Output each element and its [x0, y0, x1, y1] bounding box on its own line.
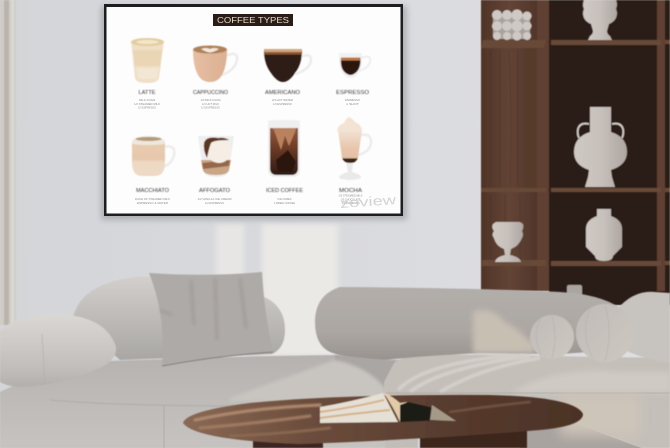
label: cappuccino: CAPPUCCINO	[193, 90, 229, 96]
label: macchiato: MACCHIATO	[136, 188, 170, 194]
seat light stripes	[398, 355, 540, 392]
recipe: affogato: 1/2 ESPRESSO	[205, 201, 225, 205]
watermark: zoview	[340, 192, 397, 211]
coffee: macchiato	[132, 136, 174, 194]
shelf back right, dark	[549, 0, 670, 305]
vase: scalloped	[583, 0, 617, 40]
recipe: mocha: 1/3 ESPRESSO	[342, 201, 360, 205]
right sofa	[315, 287, 670, 448]
recipe: iced coffee: 1 BREW COFFEE	[274, 201, 295, 205]
throw pillow	[149, 272, 273, 366]
coffee: iced coffee	[266, 120, 303, 194]
vertical posts	[525, 0, 665, 291]
recipe: mocha: 1/3 CHOCOLATE	[340, 197, 361, 201]
left bay, walnut	[481, 0, 538, 291]
bolster seam	[42, 334, 45, 385]
gap between sofa modules	[335, 355, 395, 400]
recipe: cappuccino: 1/3 ESPRESSO	[201, 106, 221, 110]
ball cushion large	[576, 304, 634, 362]
vase: amphora	[574, 107, 627, 187]
table top	[183, 395, 583, 444]
recipe: latte	[134, 98, 160, 110]
poster frame	[104, 4, 403, 216]
table streaks	[195, 402, 530, 436]
vase: low cup	[492, 222, 523, 262]
poster shadow	[101, 6, 407, 220]
base vertical seam	[163, 406, 165, 448]
recipe: macchiato	[135, 197, 170, 205]
seat edge	[384, 392, 670, 394]
arm bolster	[0, 314, 116, 387]
table legs	[253, 430, 527, 448]
label: latte: LATTE	[138, 90, 156, 96]
label: espresso: ESPRESSO	[336, 90, 370, 96]
recipe: latte: 1/3 ESPRESSO	[138, 106, 157, 110]
recipe: macchiato: ESPRESSO & WATER	[137, 201, 168, 205]
recipe: iced coffee: ICE CUBES	[278, 197, 292, 201]
seat highlight	[510, 371, 670, 393]
right arm cushion	[619, 292, 670, 363]
recipe: americano	[272, 98, 293, 106]
coffee: americano	[264, 49, 311, 96]
recipe: cappuccino	[200, 98, 221, 110]
label: iced coffee: ICED COFFEE	[266, 188, 303, 194]
sofa back cushion	[73, 277, 285, 360]
label: americano: AMERICANO	[265, 90, 301, 96]
sunlight patch on back	[473, 310, 535, 353]
shelf boards	[481, 40, 670, 266]
coffee: affogato	[198, 136, 234, 194]
coffee: mocha	[337, 117, 371, 194]
recipe: espresso: ESPRESSO	[345, 98, 361, 102]
recipe: americano: 1/3 ESPRESSO	[273, 102, 293, 106]
recipe: latte: MILK FOAM	[139, 98, 156, 102]
coffee: cappuccino	[193, 46, 237, 96]
title	[213, 14, 293, 26]
recipe: iced coffee	[274, 197, 295, 205]
vase: small behind sofa	[567, 285, 582, 296]
recipe: mocha: 1/3 STEAMED MILK	[338, 194, 363, 198]
recipe: macchiato: DASH OF STEAMED MILK	[135, 197, 170, 201]
coffee table	[183, 392, 583, 448]
recipe: cappuccino: 1/3 MILK FOAM	[200, 98, 221, 102]
coffee: espresso	[336, 53, 370, 96]
recipe: espresso: 1 SHOT	[346, 102, 359, 106]
wood grain	[491, 50, 527, 260]
recipe: espresso	[345, 98, 361, 106]
recipe: latte: 1/2 STEAMED MILK	[134, 102, 160, 106]
recipe: affogato: 1/2 VANILLA ICE CREAM	[198, 197, 232, 201]
recipe: americano: 2/3 HOT WATER	[272, 98, 293, 102]
window light on wall	[216, 224, 338, 356]
bookshelf	[481, 0, 670, 305]
vase: bubble stack	[492, 10, 532, 40]
recipe: cappuccino: 1/3 HOT MILK	[202, 102, 219, 106]
coffee: latte	[131, 38, 164, 96]
title: COFFEE TYPES	[217, 15, 289, 25]
right sofa base and seat	[384, 354, 670, 448]
framed poster	[104, 4, 403, 216]
ball cushion small	[530, 315, 574, 359]
recipe: mocha	[338, 194, 363, 205]
label: mocha: MOCHA	[339, 188, 362, 194]
sofa seat and base	[0, 355, 400, 448]
vase: faceted	[586, 209, 622, 261]
poster paper	[106, 7, 400, 214]
recipe: affogato	[198, 197, 232, 205]
sofa back long cushion	[315, 287, 620, 360]
seat seam	[50, 400, 240, 406]
base sunlight	[560, 396, 640, 436]
curtain	[0, 0, 16, 325]
magazine	[320, 392, 456, 423]
label: affogato: AFFOGATO	[199, 188, 231, 194]
floor under right sofa	[520, 423, 642, 448]
left seat sunlit cushion	[230, 360, 385, 402]
left sofa	[0, 272, 400, 448]
